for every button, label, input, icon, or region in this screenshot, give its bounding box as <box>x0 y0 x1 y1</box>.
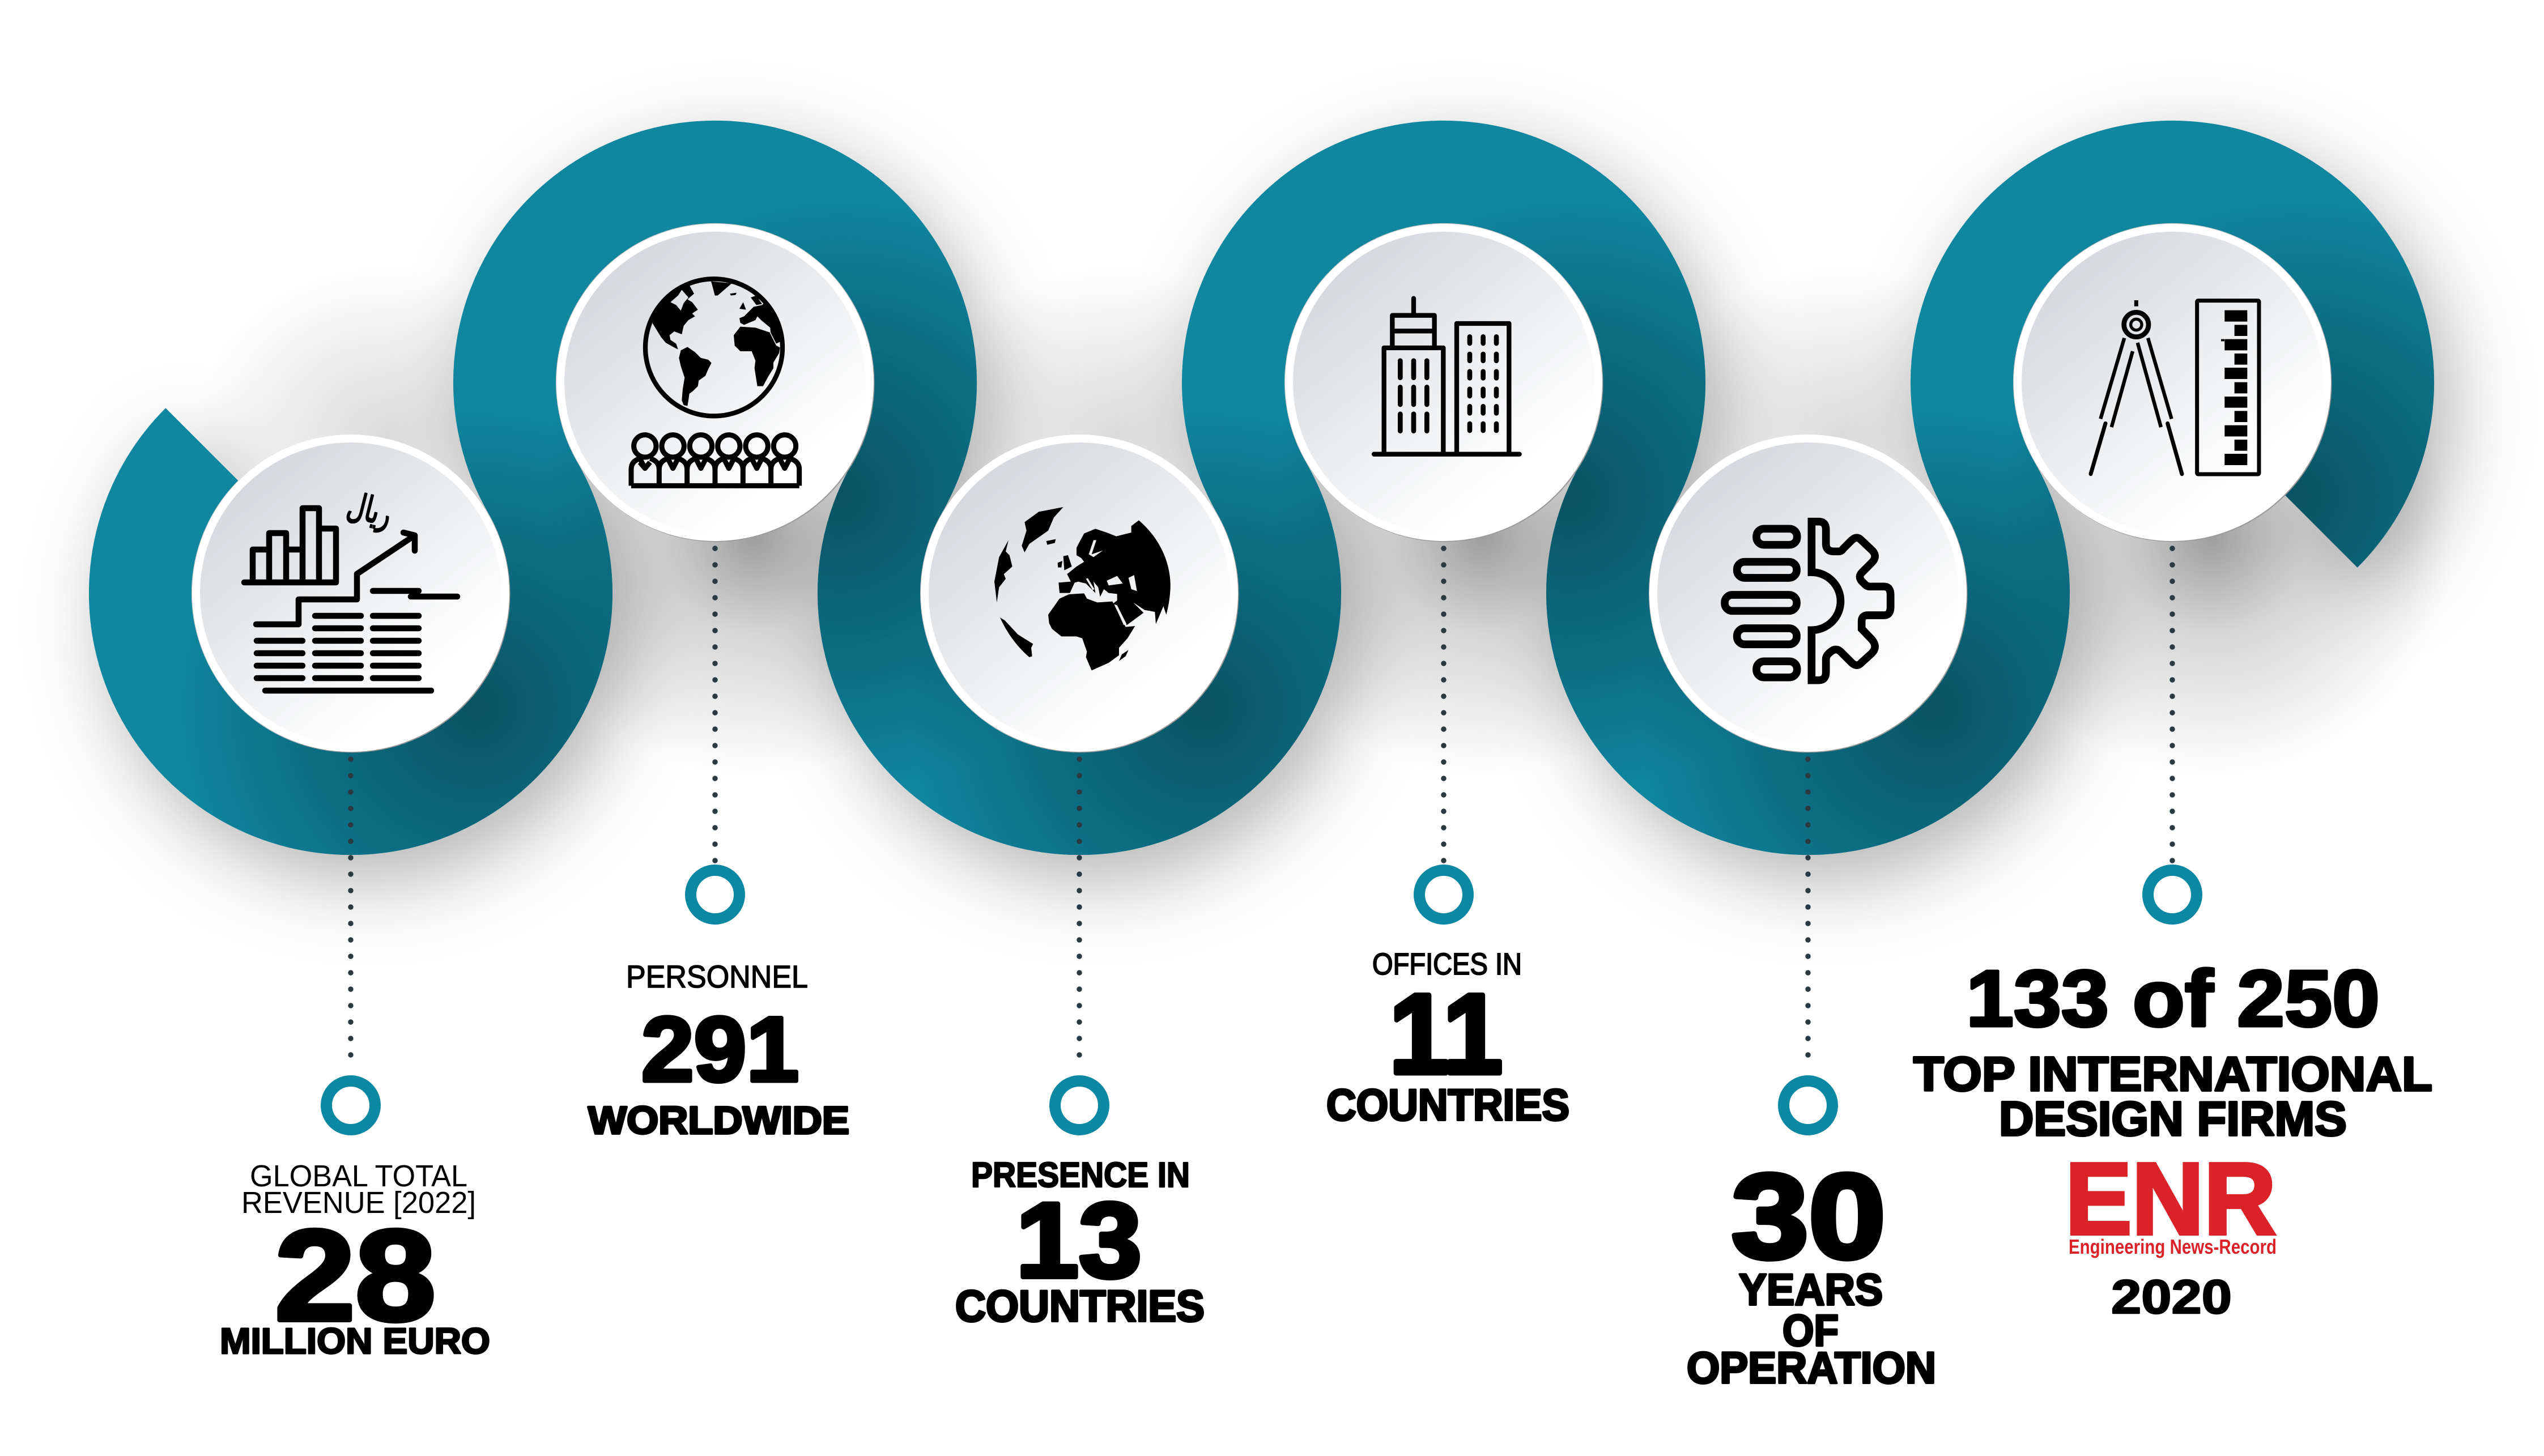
text block: design firm ranking: 2020 <box>2111 1270 2232 1323</box>
icon: gear with pills <box>1725 522 1891 680</box>
text block: revenue: REVENUE [2022] <box>241 1186 476 1220</box>
text block: personnel: 291 <box>641 998 799 1101</box>
background shadows <box>157 197 2454 829</box>
text block: offices: COUNTRIES <box>1326 1080 1569 1130</box>
ENR logo: ENR <box>2065 1142 2276 1256</box>
text block: revenue: GLOBAL TOTAL <box>250 1159 467 1193</box>
icon: revenue chart and stairs: ریال <box>343 484 396 535</box>
text block: design firm ranking <box>1913 953 2432 1323</box>
text block: personnel: WORLDWIDE <box>588 1099 849 1142</box>
icon: Europe and Africa globe <box>994 507 1171 670</box>
icon: compass and ruler <box>2091 300 2259 474</box>
text block: revenue <box>220 1159 490 1361</box>
text block: design firm ranking: DESIGN FIRMS <box>1999 1092 2347 1146</box>
text block: offices: OFFICES IN <box>1372 947 1522 981</box>
node rings <box>326 870 2197 1130</box>
text block: revenue: MILLION EURO <box>220 1321 490 1361</box>
text block: years of operation: OF <box>1782 1305 1839 1355</box>
text block: personnel <box>588 959 849 1142</box>
text block: years of operation: YEARS <box>1739 1265 1883 1314</box>
text block: presence <box>955 1156 1205 1331</box>
ENR logo: Engineering News-Record <box>2069 1235 2277 1258</box>
text block: design firm ranking: 133 of 250 <box>1966 953 2380 1043</box>
dotted connectors <box>351 548 2172 1071</box>
text block: revenue: 28 <box>275 1204 436 1348</box>
text block: years of operation: 30 <box>1732 1149 1886 1283</box>
text block: offices <box>1326 947 1569 1130</box>
icon: office buildings <box>1374 299 1520 454</box>
text block: design firm ranking: TOP INTERNATIONAL <box>1913 1048 2432 1101</box>
text block: offices: 11 <box>1389 971 1503 1097</box>
white discs <box>192 224 2332 752</box>
winding teal ribbon <box>88 120 2434 855</box>
text block: presence: PRESENCE IN <box>971 1156 1190 1195</box>
text block: presence: 13 <box>1016 1181 1142 1300</box>
text block: presence: COUNTRIES <box>955 1281 1205 1331</box>
icon: globe with personnel <box>631 279 799 486</box>
icon: revenue chart and stairs <box>244 484 457 691</box>
text block: personnel: PERSONNEL <box>626 959 808 994</box>
text block: years of operation <box>1687 1149 1936 1393</box>
text block: years of operation: OPERATION <box>1687 1343 1936 1393</box>
